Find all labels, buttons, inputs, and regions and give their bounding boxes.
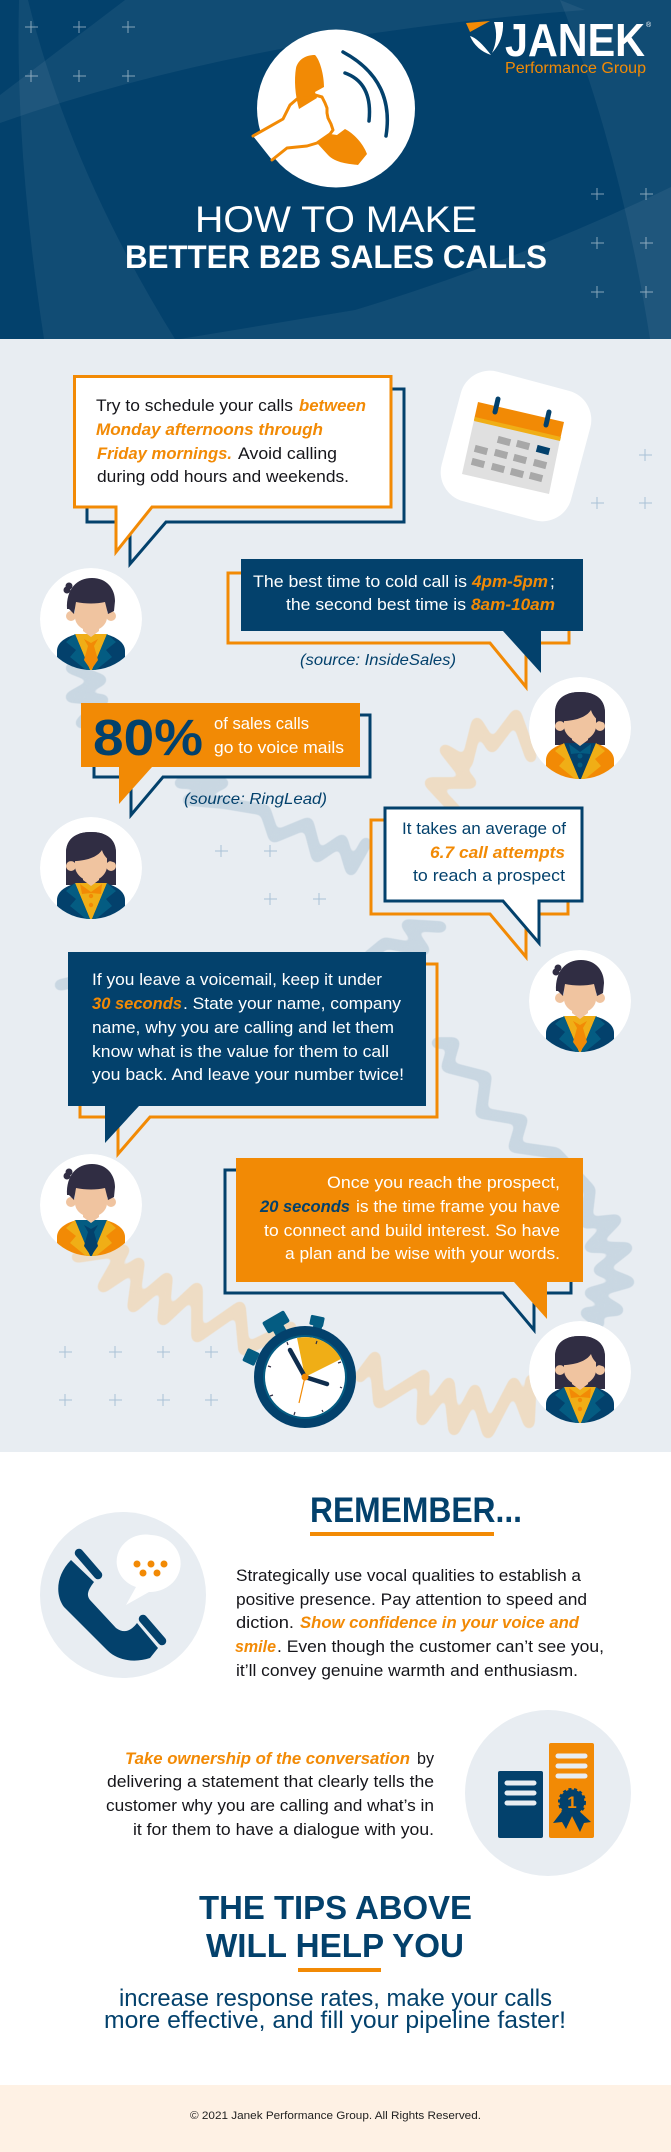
logo: Janek Performance Group: ® [646,21,652,29]
stat callout: 80% of calls go to voice mail: go to voice mails [214,738,344,757]
speech bubble: 20 seconds: Once you reach the prospect, [327,1173,560,1192]
speech bubble: voicemail advice: If you leave a voicemail, keep it under [92,970,382,989]
header panel [0,0,671,339]
speech bubble: schedule your calls: during odd hours and weekends. [97,467,349,486]
speech bubble: voicemail advice: . State your name, company [183,994,402,1013]
speech bubble: best time to cold call: 8am-10am [471,595,555,614]
text block: vocal qualities [235,1566,604,1680]
text block: take ownership: Take ownership of the conversation [125,1749,410,1768]
stat callout: 80% of calls go to voice mail: 80% [93,709,203,766]
speech bubble: best time to cold call: The best time to cold call is [253,572,467,591]
speech bubble: schedule your calls: Monday afternoons through [96,420,323,439]
text block: take ownership [106,1749,434,1839]
icon: stopwatch [242,1310,356,1428]
logo: Janek Performance Group: Performance Group [505,60,646,77]
phone cord: blue [60,668,629,1323]
white panel: remember section [0,1452,671,2085]
speech bubble: schedule your calls: Avoid calling [238,444,337,463]
speech bubble: best time to cold call: the second best time is [286,595,466,614]
light background panel: call tips [0,339,671,1452]
icon: telephone with speech bubble [40,1512,206,1678]
heading: the tips above will help you: WILL HELP YOU [206,1927,464,1964]
heading: the tips above will help you: THE TIPS ABOVE [199,1889,472,1926]
text block: vocal qualities: Strategically use vocal qualities to establish a [236,1566,582,1585]
speech bubble: best time to cold call: ; [550,572,555,591]
text block: vocal qualities: smile [235,1637,276,1656]
speech bubble: 20 seconds: 20 seconds [259,1197,350,1216]
avatar: man with navy jacket [40,568,142,670]
closing text: increase response rates, make your calls [119,1985,552,2012]
footer: © 2021 Janek Performance Group. All Rights Reserved. [190,2110,481,2122]
icon: hand holding telephone [253,30,415,188]
text block: take ownership: it for them to have a dialogue with you. [133,1820,434,1839]
speech bubble: voicemail advice: 30 seconds [92,994,182,1013]
title [125,199,547,275]
speech bubble: schedule your calls: Friday mornings. [97,444,232,463]
speech bubble: 20 seconds: is the time frame you have [356,1197,560,1216]
avatar: woman with navy jacket [40,817,142,919]
speech bubble: best time to cold call: 4pm-5pm [471,572,548,591]
logo: Janek Performance Group [466,14,652,77]
text block: take ownership: customer why you are calling and what’s in [106,1796,434,1815]
title: BETTER B2B SALES CALLS [125,239,547,275]
speech bubble: voicemail advice: you back. And leave your number twice! [92,1065,404,1084]
text block: vocal qualities: . Even though the customer can’t see you, [277,1637,604,1656]
closing text: more effective, and fill your pipeline faster! [104,2007,566,2034]
speech bubble: voicemail advice: name, why you are calling and let them [92,1018,394,1037]
text block: take ownership: delivering a statement that clearly tells the [107,1772,434,1791]
speech bubble: voicemail advice [68,952,437,1154]
phone cord: tan [77,715,531,1433]
speech bubble: voicemail advice: know what is the value for them to call [92,1042,389,1061]
icon: documents with award badge [465,1710,631,1876]
icon: documents with award badge: 1 [567,1793,577,1812]
speech bubble: 20 seconds: to connect and build interest. So have [264,1221,560,1240]
avatar: man with orange jacket [40,1154,142,1256]
text block: vocal qualities: it’ll convey genuine warmth and enthusiasm. [236,1661,578,1680]
logo: Janek Performance Group: JANEK [505,14,645,66]
title: HOW TO MAKE [195,199,477,240]
speech bubble: schedule your calls: between [299,396,366,415]
speech bubble: 6.7 call attempts: to reach a prospect [413,866,565,885]
speech bubble: schedule your calls: Try to schedule your calls [96,396,293,415]
text block: vocal qualities: Show confidence in your voice and [300,1613,580,1632]
source note: InsideSales: (source: InsideSales) [300,652,456,669]
avatar: woman with orange jacket [529,677,631,779]
footer [0,2085,671,2152]
speech bubble: 6.7 call attempts: It takes an average of [402,819,566,838]
closing text [104,1985,566,2034]
speech bubble: 20 seconds [225,1158,583,1330]
speech bubble: 20 seconds: a plan and be wise with your words. [285,1244,560,1263]
speech bubble: schedule your calls [74,376,404,564]
text block: vocal qualities: diction. [236,1613,294,1632]
speech bubble: best time to cold call [228,559,583,687]
speech bubble: 6.7 call attempts: 6.7 call attempts [430,843,565,862]
avatar: woman with navy jacket 2 [529,1321,631,1423]
heading: remember: REMEMBER... [310,1491,522,1530]
stat callout: 80% of calls go to voice mail: of sales calls [214,714,309,733]
avatar: man with navy jacket 2 [529,950,631,1052]
text block: vocal qualities: positive presence. Pay attention to speed and [236,1590,587,1609]
heading: the tips above will help you [199,1889,472,1972]
text block: take ownership: by [417,1749,434,1768]
source note: RingLead: (source: RingLead) [184,791,327,808]
icon: calendar [434,364,598,528]
speech bubble: 6.7 call attempts [371,808,582,957]
stat callout: 80% of calls go to voice mail [81,703,370,815]
